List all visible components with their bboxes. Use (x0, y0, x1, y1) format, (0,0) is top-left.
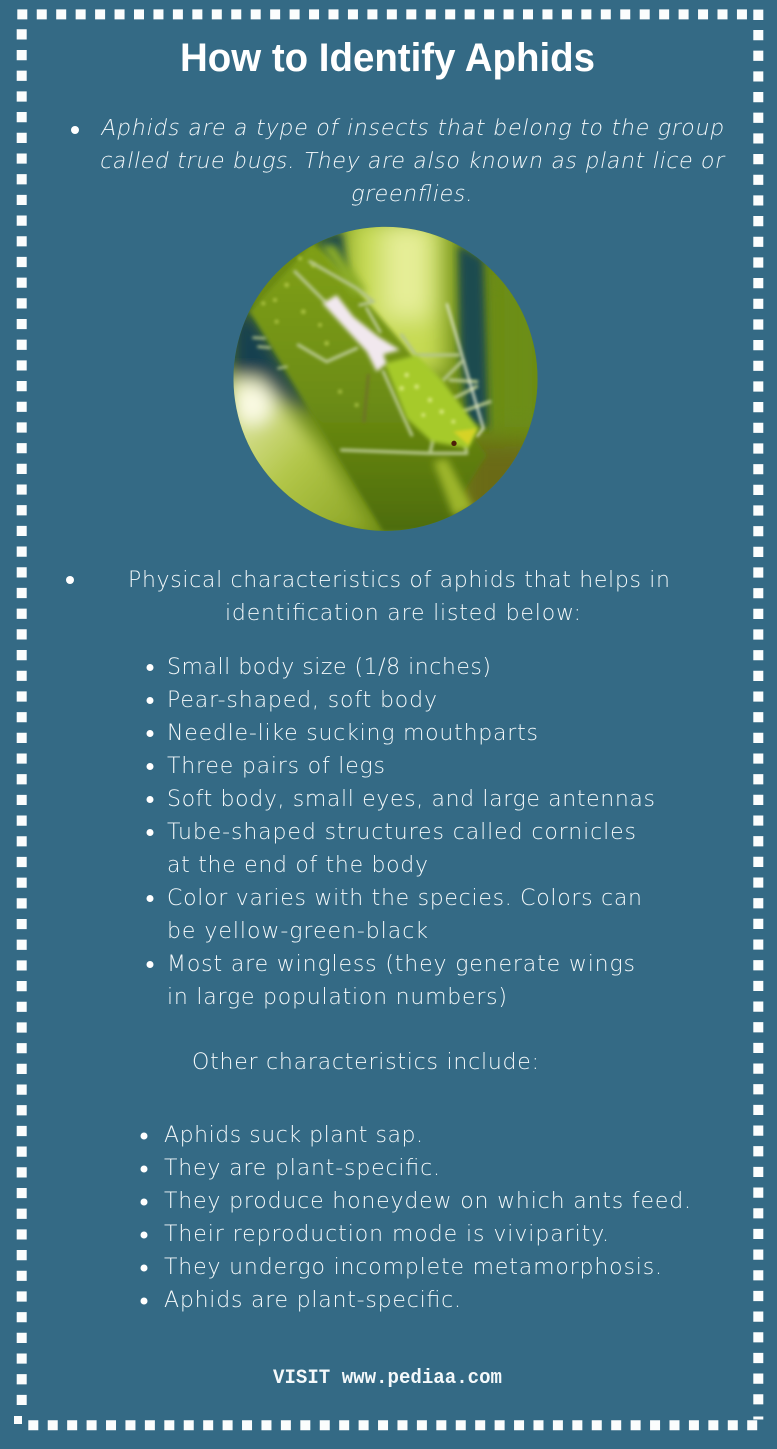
other characteristics list: They undergo incomplete metamorphosis. (164, 1255, 662, 1280)
physical characteristics list: Soft body, small eyes, and large antennas (167, 787, 655, 812)
physical characteristics list (146, 655, 655, 1010)
other characteristics heading: Other characteristics include: (192, 1050, 539, 1075)
aphid legs (253, 262, 490, 453)
intro paragraph (71, 115, 728, 207)
dark band behind aphid (458, 245, 488, 428)
physical characteristics list: at the end of the body (167, 853, 428, 878)
other characteristics list: Their reproduction mode is viviparity. (164, 1222, 609, 1247)
physical characteristics list: Three pairs of legs (167, 754, 385, 779)
physical characteristics list: in large population numbers) (167, 985, 507, 1010)
dark gap behind leaf top (317, 232, 347, 272)
intro paragraph: greenflies. (349, 181, 476, 207)
leaf blade (250, 244, 487, 532)
other characteristics list: They produce honeydew on which ants feed. (164, 1189, 691, 1214)
physical characteristics heading: identification are listed below: (225, 601, 581, 626)
other characteristics list: Aphids are plant-specific. (164, 1288, 461, 1313)
physical characteristics list: Color varies with the species. Colors can (167, 886, 642, 911)
physical characteristics list: be yellow-green-black (167, 919, 428, 944)
other characteristics list: They are plant-specific. (164, 1156, 440, 1181)
footer: website: VISIT www.pediaa.com (273, 1367, 502, 1390)
other characteristics list (140, 1123, 691, 1313)
intro paragraph: Aphids are a type of insects that belong to the group (99, 115, 727, 141)
physical characteristics heading: Physical characteristics of aphids that helps in (128, 568, 670, 593)
aphid white thorax (323, 295, 400, 372)
aphid antenna (447, 303, 483, 437)
physical characteristics list: Small body size (1/8 inches) (167, 655, 491, 680)
intro paragraph: called true bugs. They are also known as plant lice or (98, 148, 728, 174)
title: How to Identify Aphids (180, 36, 595, 80)
physical characteristics heading (66, 568, 670, 626)
physical characteristics list: Needle-like sucking mouthparts (167, 721, 538, 746)
physical characteristics list: Tube-shaped structures called cornicles (167, 820, 636, 845)
aphid abdomen (385, 355, 478, 448)
photo: aphid on a green leaf (234, 226, 538, 531)
physical characteristics list: Pear-shaped, soft body (167, 688, 437, 713)
leaf speckles (261, 256, 359, 407)
physical characteristics list: Most are wingless (they generate wings (167, 952, 635, 977)
other characteristics list: Aphids suck plant sap. (164, 1123, 423, 1148)
